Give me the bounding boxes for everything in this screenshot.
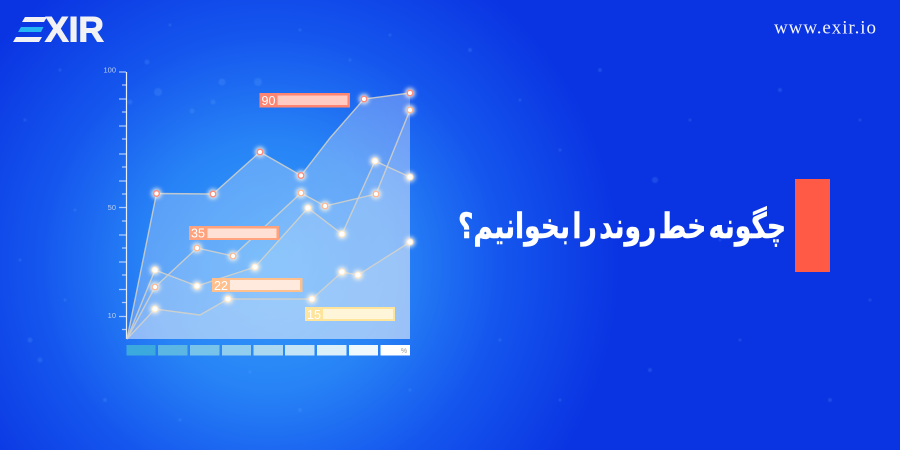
callout: 90: 90 [262,94,275,108]
logo wordmark: XIR [45,10,104,50]
website address: www.exir.io [774,18,876,38]
y axis labels: 100 [103,66,116,74]
legend scale bar: % [401,348,407,355]
red accent block [795,179,830,272]
logo icon: stripes [13,17,47,42]
callout: 22 [212,278,302,293]
data points: red series [154,90,413,197]
callout: 15 [305,307,395,322]
line chart [103,66,415,356]
y axis [119,72,126,339]
y axis labels [103,66,116,320]
chart areas [127,93,410,339]
trend lines [127,93,410,339]
callout: 22: 22 [214,279,228,293]
data points: orange series [152,107,413,290]
data points: light series [152,158,413,312]
y axis labels: 10 [108,311,116,320]
title: چگونه خط روند را بخوانیم؟ [458,206,786,247]
legend scale bar [126,345,410,356]
callout: 35: 35 [191,226,205,240]
callout: 35 [189,226,279,240]
y axis labels: 50 [108,203,116,212]
callout: 15: 15 [307,308,321,322]
logo: EXIR [13,10,104,50]
data points: glow [150,88,415,314]
callout: 90 [260,93,350,108]
